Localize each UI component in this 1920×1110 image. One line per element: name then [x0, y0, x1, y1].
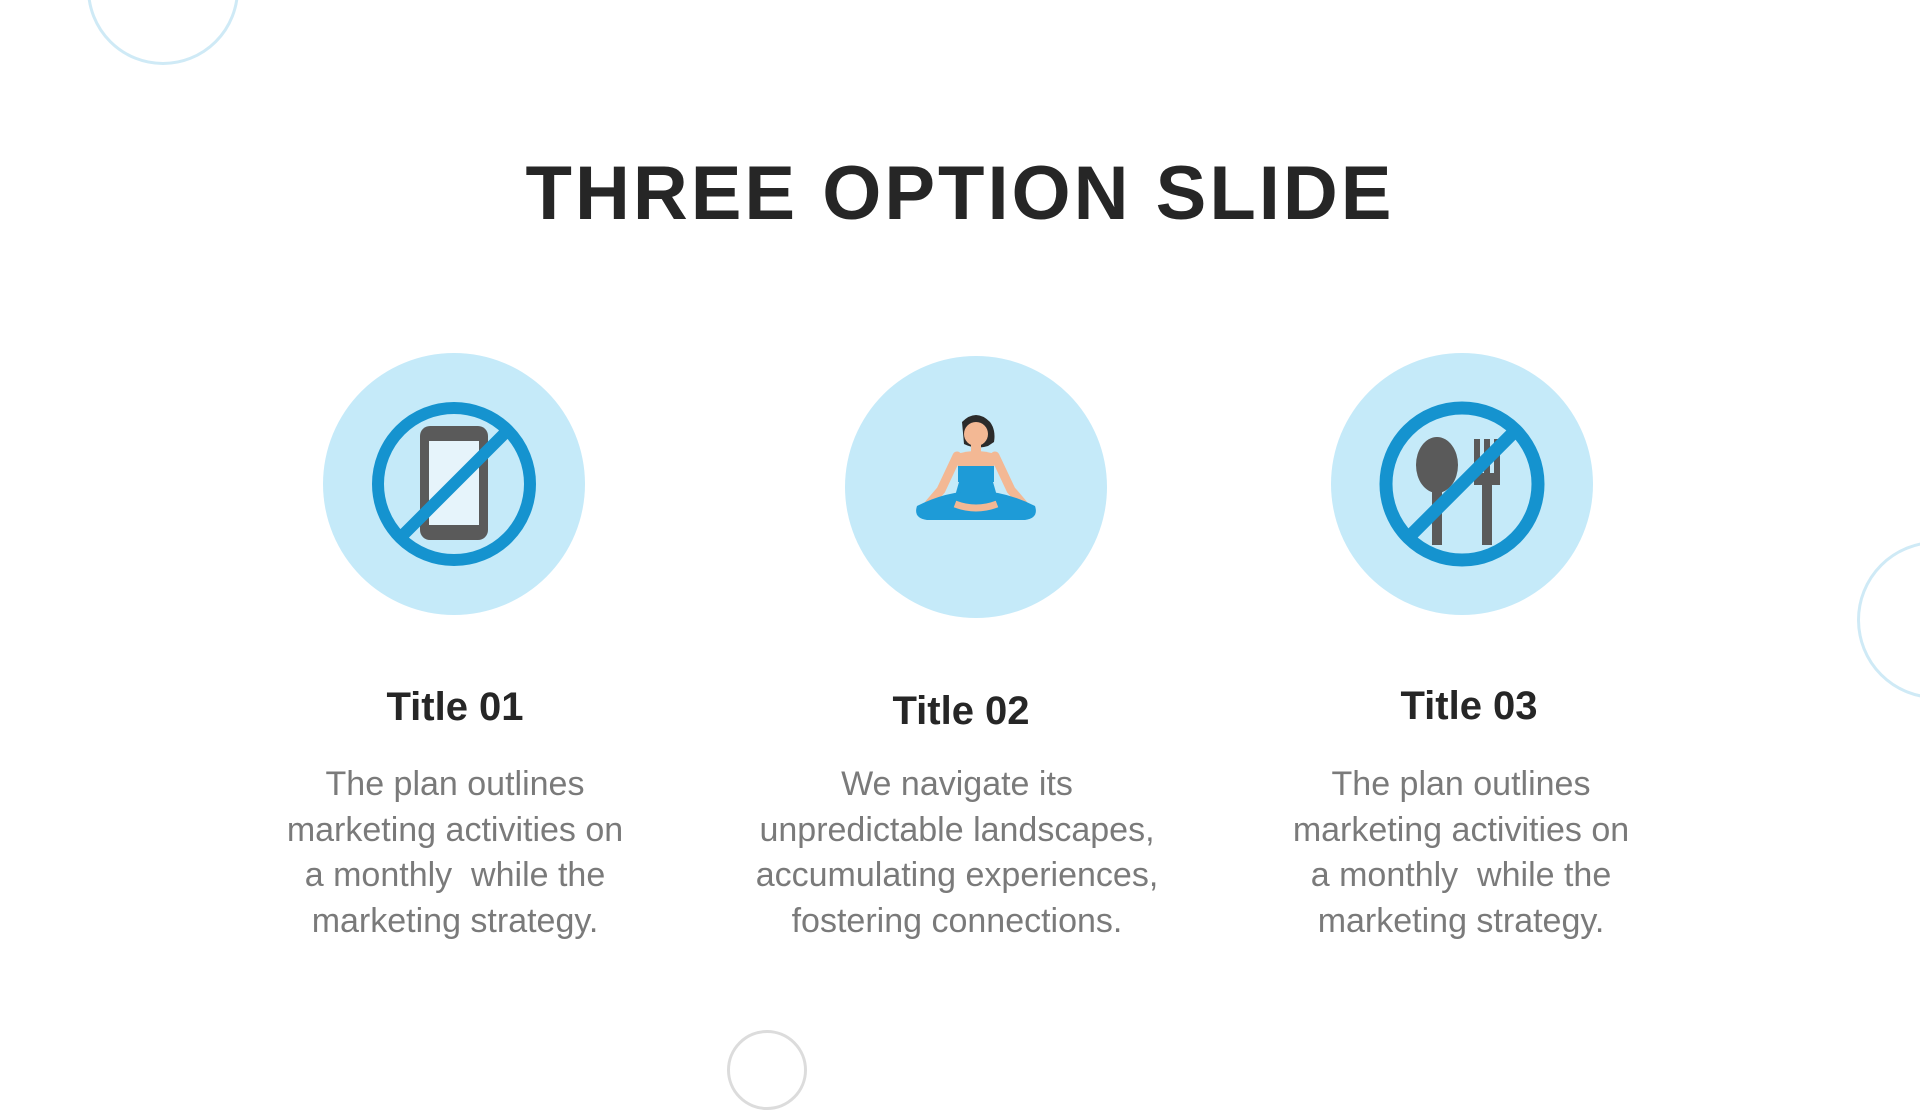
- text: option 3: a monthly while the: [1311, 856, 1611, 894]
- heading: Title 03: Title 03: [1400, 684, 1538, 728]
- text: option 2: unpredictable landscapes,: [759, 810, 1155, 848]
- decorative circle bottom: [727, 1030, 807, 1110]
- text: option 3: [1293, 765, 1629, 940]
- text: option 1: [287, 765, 623, 940]
- icon: no phone: [323, 353, 585, 615]
- text: option 3: marketing strategy.: [1318, 902, 1604, 940]
- text: option 1: marketing activities on: [287, 810, 623, 848]
- icon: no eating: [1331, 353, 1593, 615]
- decorative circle top-left: [87, 0, 239, 65]
- text: option 3: The plan outlines: [1332, 765, 1590, 803]
- text: option 2: We navigate its: [841, 765, 1073, 803]
- text: option 1: marketing strategy.: [312, 902, 598, 940]
- heading: Title 02: Title 02: [892, 689, 1030, 733]
- text: option 3: marketing activities on: [1293, 810, 1629, 848]
- text: option 1: The plan outlines: [326, 765, 584, 803]
- title: THREE OPTION SLIDE: [526, 151, 1394, 236]
- heading: Title 01: Title 01: [386, 685, 524, 729]
- text: option 2: [756, 765, 1158, 940]
- icon: meditation: [845, 356, 1107, 618]
- decorative circle right: [1857, 541, 1920, 699]
- text: option 2: accumulating experiences,: [756, 856, 1158, 894]
- text: option 1: a monthly while the: [305, 856, 605, 894]
- text: option 2: fostering connections.: [792, 902, 1122, 940]
